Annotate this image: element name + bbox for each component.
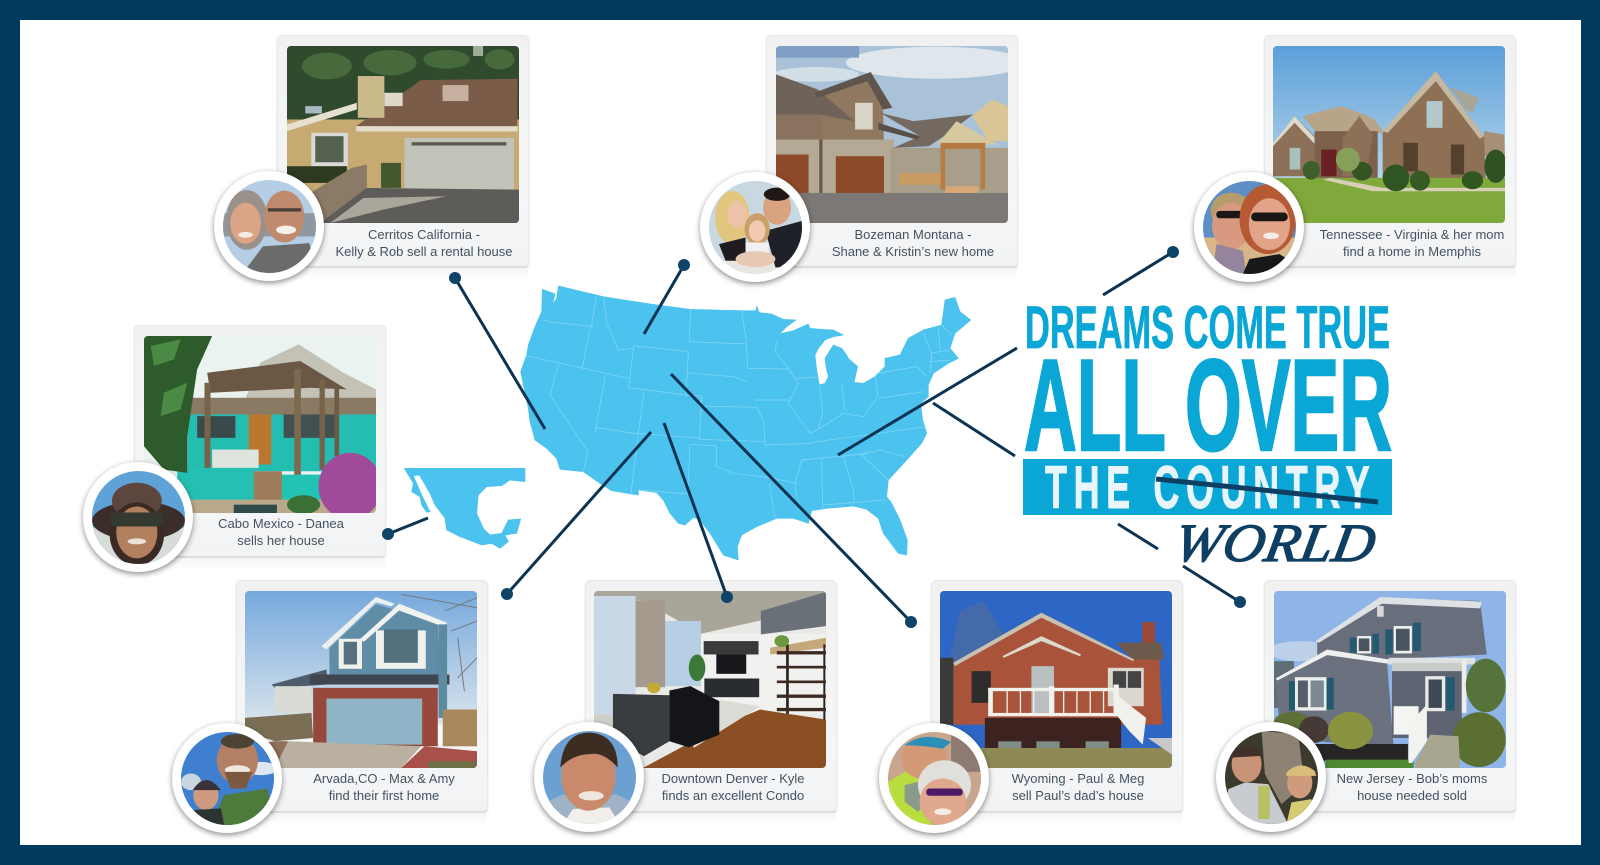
- arrow: Denver connector: [664, 423, 733, 603]
- script word: world: WORLD: [1170, 513, 1380, 573]
- photo: Bozeman house: [776, 46, 1008, 223]
- caption: Cerritos California -: [368, 227, 480, 242]
- photo: New Jersey house: [1274, 591, 1506, 768]
- title: Dreams come true all over the world: [1023, 294, 1392, 573]
- caption: [832, 227, 994, 258]
- arrow: New Jersey connector: [933, 403, 1246, 608]
- map of the United States: [521, 286, 971, 560]
- arrow: Wyoming connector: [671, 374, 917, 628]
- arrow: Bozeman connector: [644, 259, 690, 334]
- caption: [1012, 771, 1144, 802]
- portrait: Kelly and Rob: [214, 171, 324, 281]
- caption: [313, 771, 455, 802]
- caption: Cabo Mexico - Danea: [218, 516, 344, 531]
- card background: [236, 580, 488, 813]
- card background: [1264, 35, 1516, 268]
- portrait: Kyle: [534, 722, 644, 832]
- panel: Wyoming: [875, 580, 1184, 839]
- portrait: Virginia and her mom: [1194, 172, 1304, 282]
- caption: finds an excellent Condo: [662, 788, 804, 802]
- photo: Arvada house: [245, 591, 477, 768]
- caption: [1320, 227, 1504, 258]
- arrow: Arvada connector: [501, 432, 651, 600]
- panel: Tennessee: [1190, 35, 1516, 288]
- portrait: Max and Amy: [172, 723, 282, 833]
- caption: [335, 227, 513, 258]
- panel: Downtown Denver: [530, 580, 838, 838]
- caption: Bozeman Montana -: [854, 227, 972, 242]
- arrow: Tennessee connector: [838, 246, 1179, 455]
- photo: Cabo house: [144, 336, 376, 513]
- card background: [277, 35, 529, 268]
- portrait: Shane and Kristin family: [700, 172, 810, 282]
- caption: Tennessee - Virginia & her mom: [1320, 227, 1504, 242]
- caption: New Jersey - Bob’s moms: [1337, 771, 1487, 786]
- panel: Cabo Mexico: [79, 325, 386, 578]
- caption: sell Paul’s dad’s house: [1012, 788, 1144, 802]
- photo: Denver condo: [594, 591, 826, 768]
- portrait: Bob and family: [1216, 722, 1326, 832]
- caption: Arvada,CO - Max & Amy: [313, 771, 455, 786]
- card background: [585, 580, 837, 813]
- panel: Bozeman Montana: [696, 35, 1018, 288]
- card background: [134, 325, 386, 558]
- caption: find their first home: [329, 788, 439, 802]
- panel: Cerritos California: [210, 35, 530, 287]
- portrait: Paul and Meg: [879, 723, 989, 833]
- panel: New Jersey: [1212, 580, 1516, 838]
- photo: Wyoming brick house: [940, 591, 1172, 768]
- banner: the country: THE COUNTRY: [1045, 455, 1370, 521]
- caption: [218, 516, 344, 548]
- card background: [766, 35, 1018, 268]
- photo: Memphis house: [1273, 46, 1505, 223]
- caption: Downtown Denver - Kyle: [661, 771, 805, 786]
- map of Mexico: [404, 468, 525, 548]
- caption: [1337, 771, 1487, 802]
- photo: Cerritos house: [287, 46, 519, 223]
- caption: [661, 771, 805, 802]
- arrow: Cerritos connector: [449, 272, 545, 429]
- card background: [1264, 580, 1516, 813]
- panel: Arvada CO: [168, 580, 488, 839]
- portrait: Danea: [83, 462, 193, 572]
- caption: house needed sold: [1357, 788, 1467, 802]
- caption: Kelly & Rob sell a rental house: [335, 244, 513, 258]
- arrow: Cabo connector: [382, 518, 428, 540]
- caption: Shane & Kristin’s new home: [832, 244, 994, 258]
- caption: find a home in Memphis: [1343, 244, 1481, 258]
- caption: Wyoming - Paul & Meg: [1012, 771, 1144, 786]
- caption: sells her house: [237, 532, 325, 548]
- card background: [931, 580, 1183, 813]
